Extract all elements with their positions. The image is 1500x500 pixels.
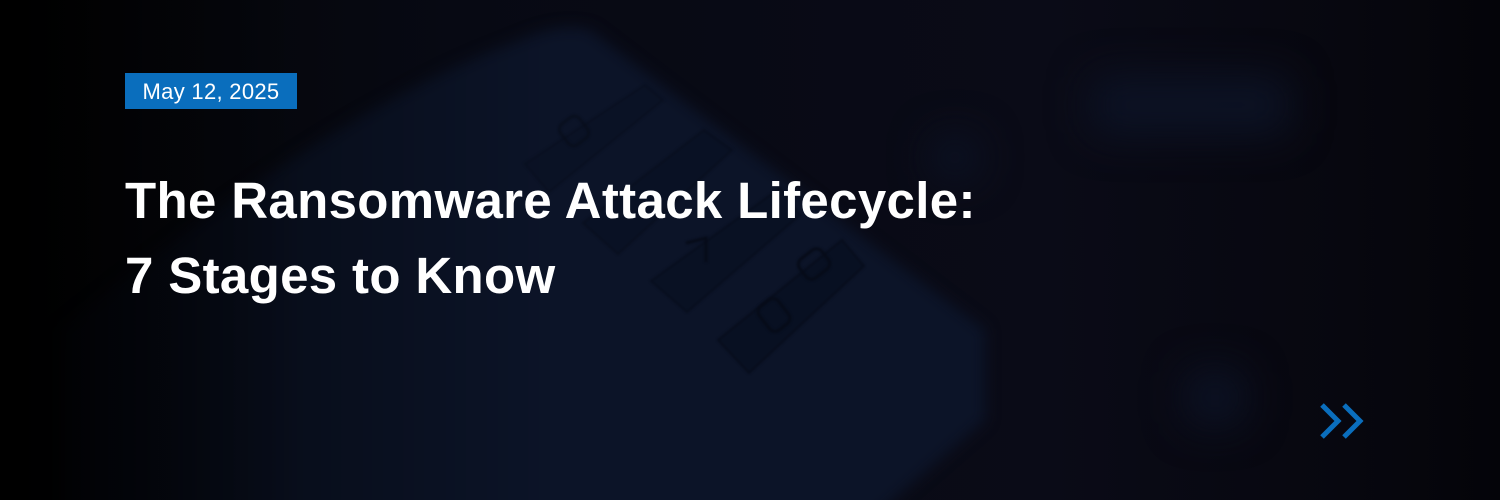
blurred background blobs — [930, 75, 1290, 425]
wheel digits — [557, 113, 832, 334]
title: 7 Stages to Know — [125, 247, 556, 304]
combination wheels — [525, 85, 864, 373]
date badge: May 12, 2025 — [143, 79, 279, 104]
icon: double chevron arrow — [1320, 403, 1364, 439]
title: The Ransomware Attack Lifecycle: — [125, 172, 976, 229]
title — [125, 172, 976, 304]
padlock body — [60, 28, 985, 500]
date badge — [125, 73, 297, 109]
